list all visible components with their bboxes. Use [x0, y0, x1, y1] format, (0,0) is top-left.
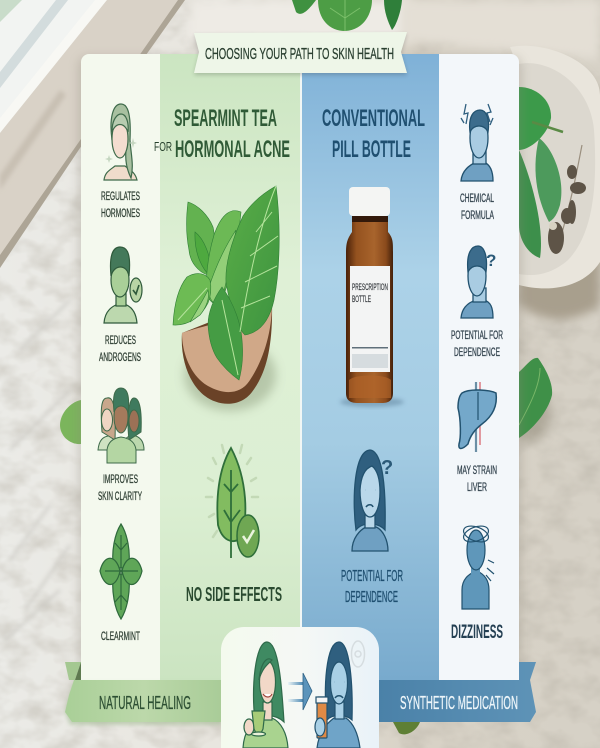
- bowl with herbs: [510, 46, 600, 319]
- label: may strain liver: LIVER: [467, 482, 487, 494]
- label: potential for dependence center: DEPENDENCE: [345, 589, 398, 606]
- label: reduces androgens: REDUCES: [105, 335, 136, 347]
- icon: worried woman: [352, 450, 388, 551]
- panel: spearmint tea: [160, 54, 300, 680]
- icon: man with headache: [461, 104, 493, 181]
- bottle body: [346, 218, 393, 403]
- label: potential for dependence center: [341, 568, 403, 606]
- label: clearmint: CLEARMINT: [101, 631, 140, 643]
- label: reduces androgens: [99, 335, 141, 364]
- top left leaf: [187, 202, 214, 275]
- ribbon: synthetic medication: [378, 662, 536, 722]
- label: may strain liver: [457, 465, 497, 494]
- heading: spearmint tea for hormonal acne: SPEARMINT TEA: [174, 105, 277, 132]
- arrow: [288, 673, 312, 710]
- label: regulates hormones: [101, 191, 140, 220]
- label: potential for dependence right: POTENTIAL FOR: [451, 330, 503, 342]
- right leaf: [510, 382, 550, 442]
- question mark: ?: [381, 457, 393, 479]
- wood slice: [182, 303, 276, 411]
- icon: man with question: [461, 246, 493, 318]
- main comparison panel: [81, 54, 519, 680]
- woman with tea: [243, 642, 288, 748]
- ribbon: natural healing: [65, 662, 222, 725]
- heading: spearmint tea for hormonal acne: HORMONAL ACNE: [175, 136, 290, 163]
- panel: right risks column: [439, 54, 519, 680]
- panel: left benefits column: [81, 54, 161, 680]
- herb leaves in bowl: [519, 87, 563, 258]
- icon: no side effects leaf with check: [206, 445, 259, 558]
- dried flower sprig: [548, 145, 586, 254]
- bottom transition card: [221, 627, 379, 748]
- icon: woman regulates hormones: [104, 104, 137, 180]
- label: improves skin clarity: [98, 474, 142, 503]
- divider panel gap: [300, 54, 302, 680]
- label: improves skin clarity: IMPROVES: [103, 474, 138, 486]
- icon: clearmint cross leaf: [100, 524, 142, 619]
- title banner: [194, 32, 407, 75]
- label: chemical formula: CHEMICAL: [460, 193, 494, 205]
- heading: conventional pill bottle: PILL BOTTLE: [332, 136, 411, 163]
- label: regulates hormones: REGULATES: [101, 191, 140, 203]
- ribbon: natural healing: NATURAL HEALING: [99, 693, 191, 713]
- bottom leaf: [393, 722, 420, 734]
- pill bottle: PRESCRIPTION: [352, 282, 388, 292]
- label: potential for dependence right: DEPENDENCE: [454, 347, 500, 359]
- panel shadow: [78, 56, 522, 684]
- question mark: ?: [486, 251, 496, 270]
- illustration: mint on wood slice: [173, 186, 279, 411]
- label: no side effects: NO SIDE EFFECTS: [186, 584, 282, 606]
- second leaf: [206, 211, 241, 306]
- icon: group improves skin clarity: [98, 388, 144, 463]
- big leaf: [226, 186, 279, 335]
- icon: man reduces androgens: [104, 247, 142, 323]
- lower left leaf: [173, 274, 211, 325]
- worried woman with bottle: [315, 642, 360, 748]
- heading: conventional pill bottle: CONVENTIONAL: [322, 105, 425, 132]
- label: may strain liver: MAY STRAIN: [457, 465, 497, 477]
- label: chemical formula: FORMULA: [461, 210, 494, 222]
- heading: spearmint tea for hormonal acne: FOR: [154, 139, 172, 154]
- heading: conventional pill bottle: [322, 105, 425, 163]
- label: improves skin clarity: SKIN CLARITY: [98, 491, 142, 503]
- left leaf: [60, 400, 81, 444]
- label: dizziness: DIZZINESS: [451, 622, 503, 643]
- infographic canvas: POTENTIAL FOR: [341, 568, 403, 585]
- pill bottle: BOTTLE: [352, 294, 371, 304]
- label: potential for dependence right: [451, 330, 503, 359]
- top leaves: [292, 0, 402, 31]
- pill bottle: [340, 187, 404, 407]
- heading: spearmint tea for hormonal acne: [154, 105, 290, 163]
- bottle cap: [349, 187, 390, 216]
- mint leaves: [173, 186, 279, 380]
- bottle label: [350, 266, 390, 372]
- label: regulates hormones: HORMONES: [101, 208, 140, 220]
- label: reduces androgens: ANDROGENS: [99, 352, 141, 364]
- icon: dizziness head: [461, 523, 494, 609]
- icon: liver: [458, 382, 496, 452]
- title banner: CHOOSING YOUR PATH TO SKIN HEALTH: [205, 46, 394, 63]
- bottom leaf: [208, 287, 243, 380]
- label: chemical formula: [460, 193, 494, 222]
- panel: conventional pill bottle: [302, 54, 440, 680]
- thought bubble: [352, 641, 364, 667]
